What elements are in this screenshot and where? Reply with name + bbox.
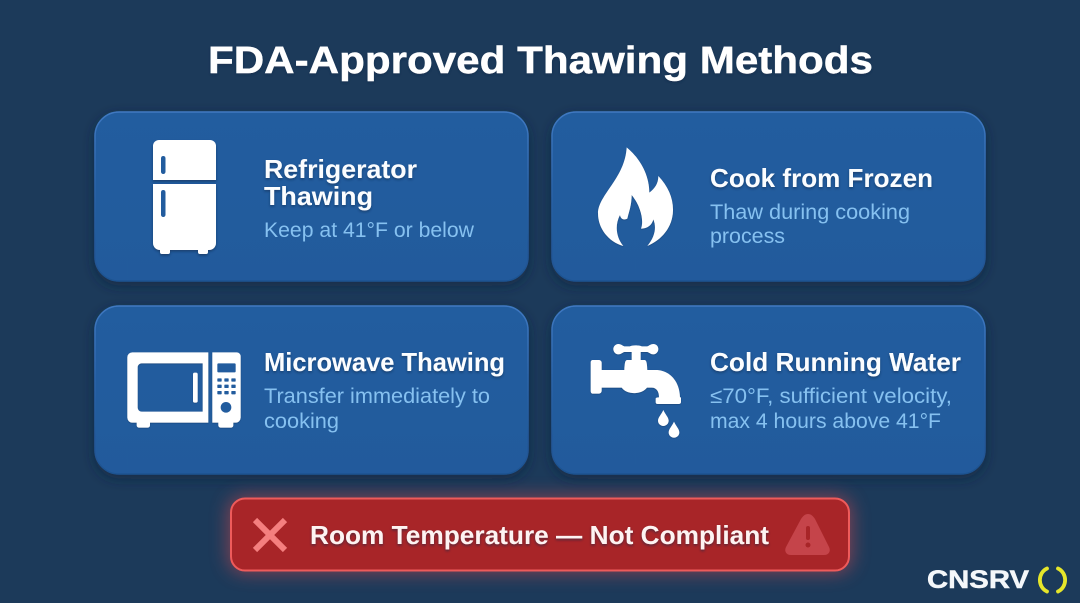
panel: cook from frozen bbox=[552, 112, 985, 281]
icon: microwave bbox=[127, 352, 241, 428]
heading: refrigerator thawing: Thawing bbox=[264, 181, 373, 211]
heading: cold running water: Cold Running Water bbox=[710, 347, 961, 377]
title: FDA-Approved Thawing Methods bbox=[208, 40, 873, 82]
icon: red cross bbox=[255, 520, 285, 550]
panel: microwave thawing bbox=[95, 306, 528, 474]
text: cook detail bbox=[710, 201, 910, 248]
panel: cold running water bbox=[552, 306, 985, 474]
text: water detail bbox=[710, 385, 952, 433]
text: refrigerator detail: Keep at 41°F or below bbox=[264, 219, 475, 242]
text: microwave detail: Transfer immediately to bbox=[264, 385, 490, 408]
callout: room temperature warning bbox=[228, 496, 852, 573]
logo: CNSRV bbox=[927, 566, 1065, 594]
icon: faucet bbox=[591, 344, 681, 438]
callout text: Room Temperature — Not Compliant bbox=[310, 520, 769, 550]
text: microwave detail bbox=[264, 385, 490, 433]
heading: microwave thawing: Microwave Thawing bbox=[264, 347, 505, 377]
logo: CNSRV: CNSRV bbox=[927, 566, 1029, 594]
heading: cook from frozen: Cook from Frozen bbox=[710, 163, 933, 193]
text: water detail: ≤70°F, sufficient velocity, bbox=[710, 385, 952, 408]
text: water detail: max 4 hours above 41°F bbox=[710, 410, 941, 433]
icon: refrigerator bbox=[153, 140, 216, 254]
text: microwave detail: cooking bbox=[264, 410, 339, 433]
icon: logo ring bbox=[1040, 568, 1065, 592]
text: cook detail: process bbox=[710, 225, 785, 248]
icon: flame bbox=[598, 147, 673, 246]
text: cook detail: Thaw during cooking bbox=[710, 201, 910, 224]
icon: warning triangle bbox=[785, 514, 830, 555]
panel: refrigerator thawing bbox=[95, 112, 528, 281]
heading: refrigerator thawing bbox=[264, 154, 417, 211]
heading: refrigerator thawing: Refrigerator bbox=[264, 154, 417, 184]
